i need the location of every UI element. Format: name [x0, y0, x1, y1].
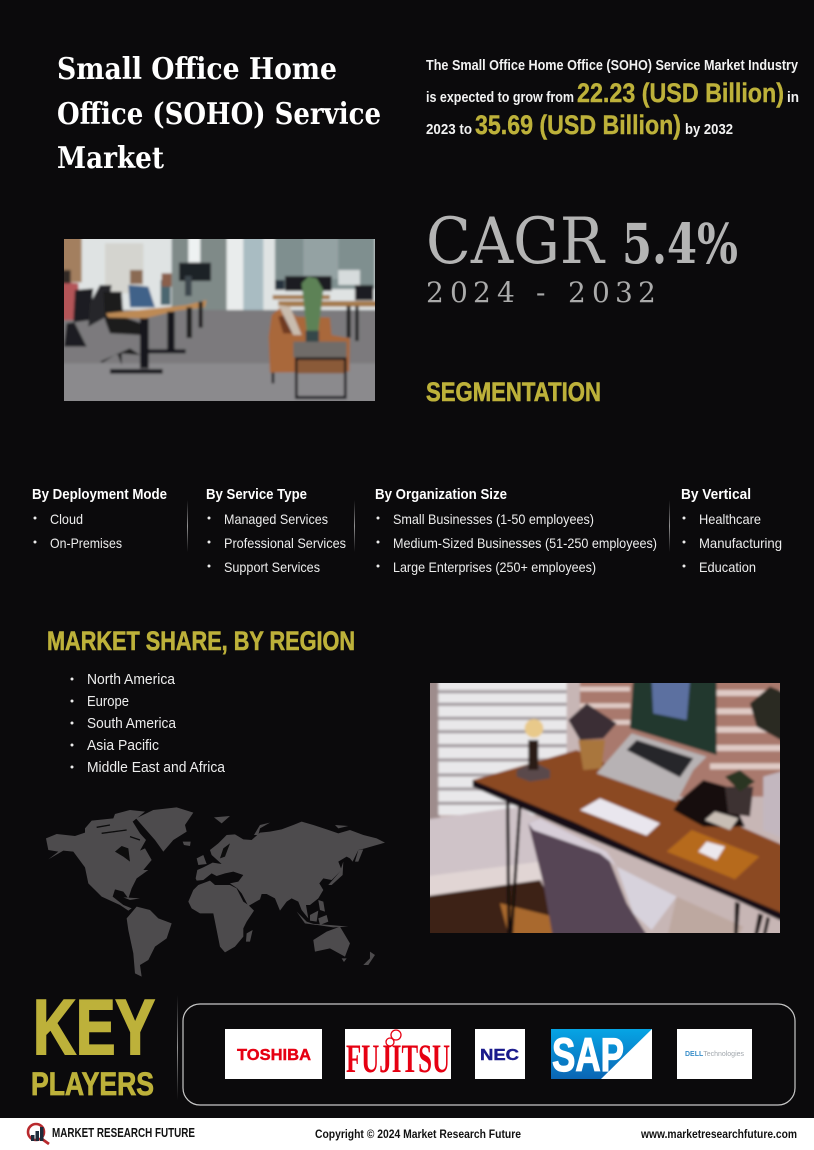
CAGR figure: 5.4% [622, 211, 738, 276]
market growth statement: by 2032 [685, 122, 733, 138]
logo: Dell Technologies [677, 1029, 752, 1079]
title: Market [57, 141, 164, 176]
segment column: by organization size: By Organization Size [375, 486, 507, 503]
logo: Fujitsu: FUJITSU [346, 1036, 450, 1081]
segment column: by service type: Managed Services [224, 511, 328, 527]
segment column: by service type [206, 486, 346, 575]
icon: magnifier with bars [28, 1124, 49, 1144]
market growth statement: is expected to grow from [426, 90, 574, 106]
segment column: by organization size: Large Enterprises (250+ employees) [393, 559, 596, 575]
segment column: by organization size: Small Businesses (1-50 employees) [393, 511, 594, 527]
segment column: by vertical: Manufacturing [699, 535, 782, 551]
segment column: by deployment mode: On-Premises [50, 535, 122, 551]
segment column: by organization size: Medium-Sized Businesses (51-250 employees) [393, 535, 657, 551]
key players heading: KEY [33, 983, 155, 1071]
market growth statement [426, 58, 799, 140]
CAGR figure: 2024 - 2032 [426, 276, 656, 309]
segment column: by vertical: By Vertical [681, 486, 751, 503]
CAGR figure [426, 205, 738, 309]
logo: Toshiba [225, 1029, 322, 1079]
photo: home office desk [423, 677, 787, 940]
region list: South America [87, 716, 177, 732]
title: Small Office Home [57, 52, 337, 87]
market growth statement: 2023 to [426, 122, 472, 138]
segmentation heading: SEGMENTATION [426, 377, 601, 407]
logo: NEC [475, 1029, 525, 1079]
segment column: by deployment mode: Cloud [50, 511, 83, 527]
segment column: by vertical: Healthcare [699, 511, 761, 527]
region list: Asia Pacific [87, 738, 159, 754]
segment column: by service type: By Service Type [206, 486, 307, 503]
market growth statement: 22.23 (USD Billion) [577, 78, 784, 108]
CAGR figure: CAGR [426, 205, 606, 279]
logo: SAP: SAP [552, 1028, 624, 1081]
world map [46, 807, 385, 977]
logo: Toshiba: TOSHIBA [237, 1047, 311, 1064]
market growth statement: in [787, 90, 799, 106]
region list: North America [87, 672, 176, 688]
key players logo panel [183, 1004, 795, 1105]
logo: Fujitsu [345, 1029, 451, 1081]
market growth statement: 35.69 (USD Billion) [475, 110, 681, 140]
region list: Europe [87, 694, 129, 710]
title [57, 52, 381, 176]
segment column: by organization size [375, 486, 657, 575]
region list [70, 672, 226, 776]
footer brand: MARKET RESEARCH FUTURE [52, 1126, 195, 1140]
segment column: by vertical [681, 486, 782, 575]
segment column: by vertical: Education [699, 559, 756, 575]
key players heading [31, 983, 155, 1102]
footer bar [0, 1118, 814, 1150]
photo: open-plan office [60, 235, 380, 405]
segment column: by service type: Support Services [224, 559, 320, 575]
segment column: by service type: Professional Services [224, 535, 346, 551]
logo: Dell Technologies: DELLTechnologies [685, 1049, 744, 1058]
segment column: by deployment mode [32, 486, 167, 551]
market share heading: MARKET SHARE, BY REGION [47, 626, 355, 656]
footer copyright: Copyright © 2024 Market Research Future [315, 1127, 521, 1141]
region list: Middle East and Africa [87, 760, 226, 776]
key players heading: PLAYERS [31, 1066, 154, 1102]
segment column: by deployment mode: By Deployment Mode [32, 486, 167, 503]
logo: NEC: NEC [480, 1047, 519, 1064]
title: Office (SOHO) Service [57, 97, 381, 132]
